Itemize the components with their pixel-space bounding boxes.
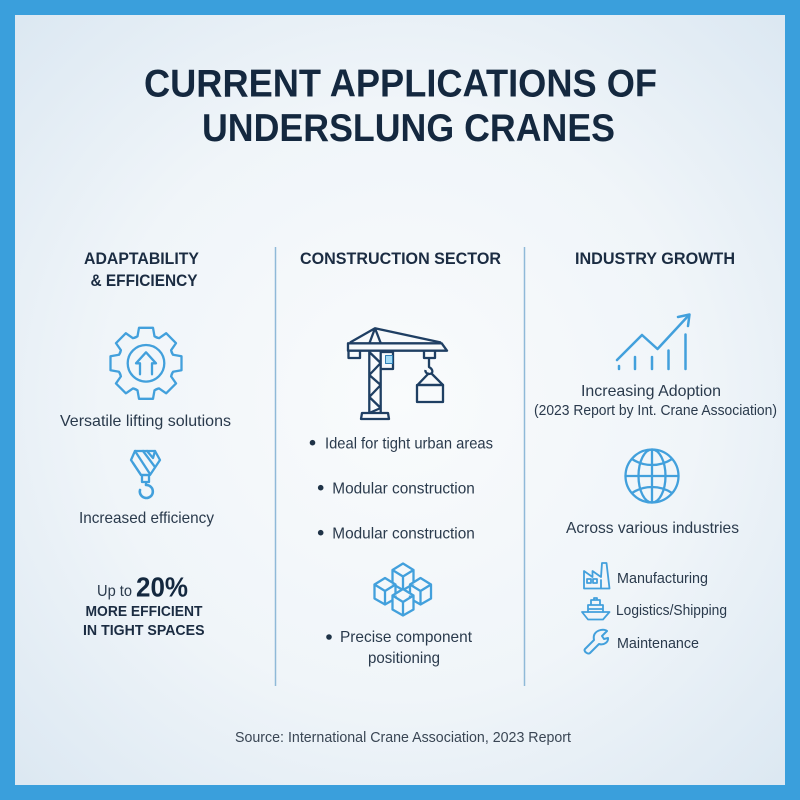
text: increasing adoption: Increasing Adoption bbox=[581, 383, 721, 400]
row: logistics and shipping bbox=[582, 598, 727, 620]
text: across various industries: Across various industries bbox=[566, 520, 739, 537]
text: increasing adoption bbox=[534, 383, 777, 419]
icon: growth chart with arrow bbox=[617, 314, 690, 369]
bullet: precise component positioning bbox=[326, 629, 473, 667]
bullet: precise component positioning: Precise component bbox=[340, 629, 473, 646]
text: increased efficiency: Increased efficiency bbox=[79, 510, 214, 527]
bullet: precise component positioning: positioning bbox=[368, 650, 440, 667]
heading: adaptability and efficiency: ADAPTABILITY bbox=[84, 249, 200, 268]
row: maintenance: Maintenance bbox=[617, 636, 699, 652]
bullet: ideal for tight urban areas: Ideal for tight urban areas bbox=[325, 435, 493, 452]
row: logistics and shipping: Logistics/Shipping bbox=[616, 603, 727, 619]
icon: wrench bbox=[585, 630, 608, 654]
heading: adaptability and efficiency bbox=[84, 249, 200, 290]
icon: globe bbox=[626, 450, 678, 502]
callout: up to 20 percent: IN TIGHT SPACES bbox=[83, 622, 204, 639]
callout: up to 20 percent: MORE EFFICIENT bbox=[86, 603, 202, 620]
icon: factory bbox=[584, 563, 610, 588]
callout: up to 20 percent: 20% bbox=[136, 572, 188, 602]
row: manufacturing bbox=[584, 563, 708, 588]
panel: adaptability and efficiency bbox=[60, 249, 231, 639]
title bbox=[144, 62, 657, 150]
title: CURRENT APPLICATIONS OF bbox=[144, 62, 657, 106]
row: maintenance bbox=[585, 630, 699, 654]
heading: industry growth: INDUSTRY GROWTH bbox=[575, 249, 735, 268]
icon: modular blocks bbox=[374, 564, 431, 616]
panel: industry growth bbox=[534, 249, 777, 654]
panel: construction sector bbox=[300, 249, 501, 667]
heading: adaptability and efficiency: & EFFICIENCY bbox=[90, 271, 198, 290]
icon: cargo ship bbox=[582, 598, 610, 620]
callout: up to 20 percent bbox=[83, 572, 204, 639]
icon: tower crane bbox=[348, 328, 447, 419]
source note: Source: International Crane Association, 2023 Report bbox=[235, 730, 571, 746]
icon: gear with up arrow bbox=[110, 328, 182, 399]
callout: up to 20 percent: Up to bbox=[97, 583, 132, 600]
bullet: modular construction repeated: Modular construction bbox=[332, 525, 475, 542]
row: manufacturing: Manufacturing bbox=[617, 571, 708, 587]
title: UNDERSLUNG CRANES bbox=[202, 107, 615, 150]
heading: construction sector: CONSTRUCTION SECTOR bbox=[300, 249, 501, 268]
text: versatile lifting solutions: Versatile lifting solutions bbox=[60, 413, 231, 430]
icon: crane hook bbox=[131, 451, 160, 498]
text: increasing adoption: (2023 Report by Int. Crane Association) bbox=[534, 403, 777, 419]
bullet: modular construction: Modular construction bbox=[332, 480, 475, 497]
